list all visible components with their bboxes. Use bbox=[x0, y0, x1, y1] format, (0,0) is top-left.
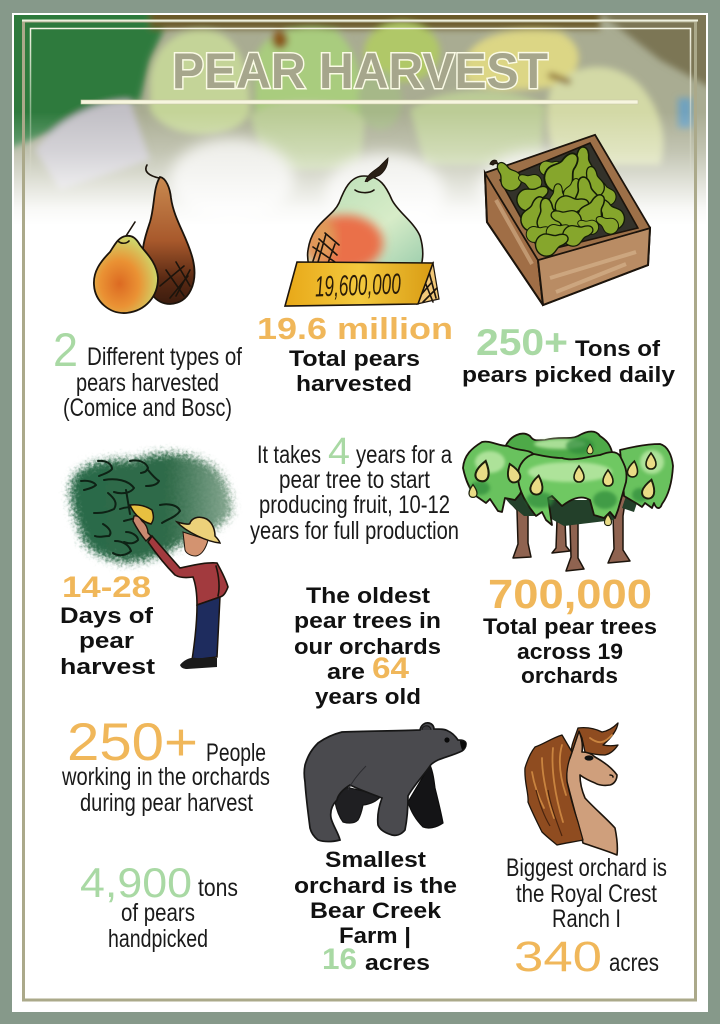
text: 4,900 tons: 4,900 bbox=[80, 859, 192, 906]
text: 4,900 tons: handpicked bbox=[108, 925, 208, 953]
text: smallest orchard: Bear Creek bbox=[310, 898, 442, 923]
text: biggest orchard: 340 bbox=[514, 933, 602, 981]
text: smallest orchard: acres bbox=[365, 950, 430, 975]
text: biggest orchard: Biggest orchard is bbox=[506, 854, 667, 882]
text: oldest trees: years old bbox=[315, 684, 421, 709]
text: oldest trees bbox=[294, 583, 441, 709]
text: oldest trees: 64 bbox=[372, 652, 409, 685]
text: biggest orchard: the Royal Crest bbox=[516, 880, 657, 908]
text: oldest trees: pear trees in bbox=[294, 608, 441, 633]
text: 4,900 tons: tons bbox=[198, 874, 238, 902]
hat bbox=[177, 517, 220, 543]
text: years to production: years for a bbox=[356, 441, 452, 469]
text: years to production: It takes bbox=[257, 441, 321, 469]
left crown bbox=[463, 442, 535, 512]
text: 250+ tons: pears picked daily bbox=[462, 362, 676, 387]
text: 19.6 million bbox=[257, 311, 453, 396]
text: 700,000 trees: across 19 bbox=[517, 639, 623, 664]
text: years to production: years for full production bbox=[250, 517, 459, 545]
text: two types of pears: pears harvested bbox=[76, 369, 219, 397]
text: 250+ people: 250+ bbox=[67, 713, 198, 772]
leaves bbox=[81, 460, 180, 555]
neck and face bbox=[567, 731, 617, 855]
text: two types of pears: Different types of bbox=[87, 343, 242, 371]
foliage highlights bbox=[475, 439, 664, 482]
dark underside bbox=[498, 490, 638, 526]
text: 250+ people: People bbox=[206, 739, 266, 767]
text: 4,900 tons: of pears bbox=[121, 899, 195, 927]
mane bbox=[525, 723, 618, 845]
text: two types of pears bbox=[53, 323, 242, 422]
price tag number: 19,600,000 bbox=[314, 269, 401, 303]
pears on trees bbox=[469, 444, 657, 526]
text: 700,000 trees: orchards bbox=[521, 663, 618, 688]
text: biggest orchard bbox=[506, 854, 667, 981]
text: years to production: 4 bbox=[328, 431, 350, 473]
text: 14-28 days: Days of bbox=[60, 603, 154, 628]
text: two types of pears: (Comice and Bosc) bbox=[63, 394, 232, 422]
pear in hand bbox=[130, 505, 153, 524]
text: biggest orchard: acres bbox=[609, 949, 659, 977]
right crown bbox=[620, 444, 673, 508]
icon: wooden crate of pears bbox=[485, 135, 650, 305]
text: 700,000 trees bbox=[483, 571, 657, 688]
text: oldest trees: The oldest bbox=[306, 583, 431, 608]
text: two types of pears: 2 bbox=[53, 323, 78, 376]
trunks bbox=[495, 482, 633, 571]
icon: two pears bbox=[94, 165, 194, 313]
text: years to production bbox=[250, 431, 459, 545]
icon: black bear bbox=[304, 723, 466, 842]
text: years to production: pear tree to start bbox=[279, 466, 430, 494]
arm and torso bbox=[148, 536, 228, 605]
icon: pear trees bbox=[463, 432, 673, 571]
text: smallest orchard: Smallest bbox=[325, 847, 427, 872]
head bbox=[183, 532, 208, 556]
foliage bbox=[70, 454, 232, 562]
text: smallest orchard: 16 bbox=[322, 943, 357, 976]
icon: horse head bbox=[525, 723, 618, 855]
text: 4,900 tons bbox=[80, 859, 238, 953]
icon: farmer picking pear bbox=[70, 454, 232, 669]
body bbox=[304, 723, 466, 842]
text: smallest orchard: orchard is the bbox=[294, 873, 457, 898]
title rule bbox=[81, 100, 638, 104]
text: years to production: producing fruit, 10-12 bbox=[259, 491, 450, 519]
header photo of pears bbox=[14, 15, 706, 210]
text: 14-28 days bbox=[60, 571, 156, 679]
text: smallest orchard: Farm | bbox=[339, 923, 411, 948]
text: 700,000 trees: 700,000 bbox=[488, 571, 652, 617]
text: 14-28 days: 14-28 bbox=[62, 571, 151, 604]
pears in crate bbox=[490, 146, 629, 259]
text: 19.6 million: Total pears bbox=[289, 346, 420, 371]
text: biggest orchard: Ranch I bbox=[552, 905, 621, 933]
text: 250+ people: during pear harvest bbox=[80, 789, 253, 817]
text: 250+ tons: 250+ bbox=[476, 322, 568, 363]
trousers bbox=[192, 597, 220, 660]
text: 14-28 days: pear bbox=[79, 628, 134, 653]
text: 19.6 million: 19.6 million bbox=[257, 311, 453, 346]
text: oldest trees: are bbox=[327, 659, 365, 684]
text: 250+ people: working in the orchards bbox=[61, 763, 270, 791]
back leg bbox=[335, 787, 382, 823]
far front leg bbox=[408, 765, 443, 828]
text: 250+ tons: Tons of bbox=[575, 336, 661, 361]
back crown bbox=[505, 432, 612, 472]
text: smallest orchard bbox=[294, 847, 457, 976]
text: 250+ tons bbox=[462, 322, 676, 387]
text: 14-28 days: harvest bbox=[60, 654, 156, 679]
title: PEAR HARVEST bbox=[172, 43, 548, 99]
front crown bbox=[518, 452, 627, 525]
text: 19.6 million: harvested bbox=[296, 371, 412, 396]
ear bbox=[422, 726, 431, 730]
text: 250+ people bbox=[61, 713, 270, 817]
text: oldest trees: our orchards bbox=[294, 634, 441, 659]
text: 700,000 trees: Total pear trees bbox=[483, 614, 657, 639]
hand bbox=[133, 516, 151, 541]
icon: big pear with price tag bbox=[285, 158, 439, 306]
